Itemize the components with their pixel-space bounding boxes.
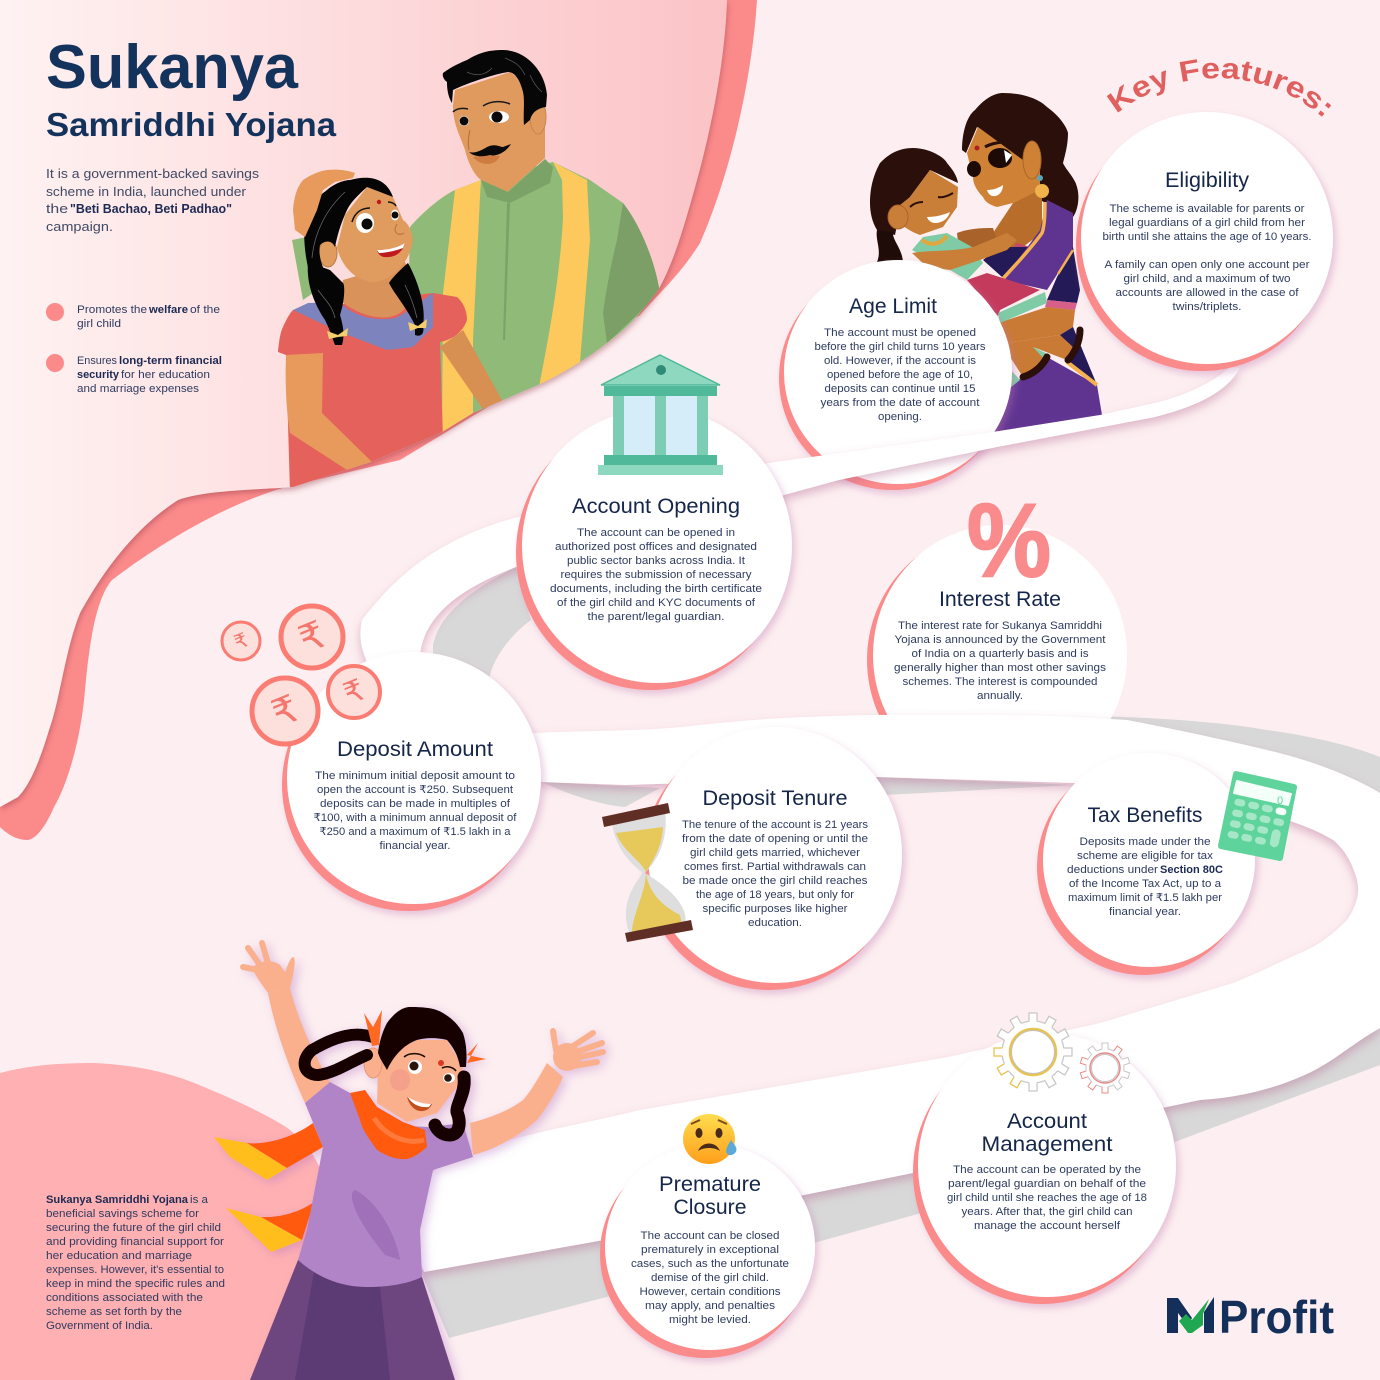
summary text: conditions associated with the bbox=[46, 1292, 203, 1304]
panel: premature closure: Premature bbox=[659, 1173, 761, 1196]
panel: eligibility: girl child, and a maximum of two bbox=[1124, 273, 1290, 285]
icon: rupee coins: ₹ bbox=[293, 614, 331, 662]
panel: deposit amount bbox=[282, 652, 541, 911]
panel: deposit amount: Deposit Amount bbox=[337, 738, 493, 761]
bullet: welfare bbox=[46, 303, 220, 330]
interest rate text: annually. bbox=[977, 690, 1023, 702]
panel: account opening: The account can be opened in bbox=[577, 527, 735, 539]
panel: account opening: of the girl child and KYC documents of bbox=[557, 597, 756, 609]
panel: deposit tenure: the age of 18 years, but only for bbox=[696, 889, 854, 901]
panel: eligibility: accounts are allowed in the case of bbox=[1116, 287, 1300, 299]
panel: deposit tenure: education. bbox=[748, 917, 802, 929]
panel: account opening: requires the submission of necessary bbox=[560, 569, 752, 581]
panel: deposit amount: ₹100, with a minimum annual deposit of bbox=[314, 812, 517, 824]
panel: account opening: public sector banks across India. It bbox=[567, 555, 745, 567]
grey underside of ribbon bbox=[420, 567, 1380, 1338]
panel: age limit: opening. bbox=[878, 411, 922, 423]
panel: tax benefits: Tax Benefits bbox=[1088, 804, 1202, 827]
panel: premature closure: The account can be closed bbox=[640, 1230, 780, 1242]
panel: deposit amount: ₹250 and a maximum of ₹1.5 lakh in a bbox=[320, 826, 511, 838]
panel: account management: parent/legal guardian on behalf of the bbox=[948, 1178, 1146, 1190]
summary text: securing the future of the girl child bbox=[46, 1222, 221, 1234]
panel: deposit amount: The minimum initial deposit amount to bbox=[315, 770, 515, 782]
bullet: financial security: Ensures bbox=[77, 355, 117, 367]
bullet: financial security: security bbox=[77, 369, 120, 381]
panel: deposit tenure: Deposit Tenure bbox=[702, 787, 848, 810]
summary text: Sukanya Samriddhi Yojana bbox=[46, 1194, 189, 1206]
summary text: scheme as set forth by the bbox=[46, 1306, 182, 1318]
panel: account management bbox=[913, 1033, 1176, 1304]
panel: tax benefits: Deposits made under the bbox=[1080, 836, 1210, 848]
summary text: expenses. However, it's essential to bbox=[46, 1264, 224, 1276]
interest rate text: of India on a quarterly basis and is bbox=[912, 648, 1089, 660]
intro text: campaign. bbox=[46, 219, 113, 234]
panel: age limit bbox=[779, 260, 1012, 490]
panel: deposit amount: financial year. bbox=[380, 840, 450, 852]
panel: tax benefits: scheme are eligible for tax bbox=[1077, 850, 1214, 862]
panel: age limit: deposits can continue until 15 bbox=[824, 383, 976, 395]
panel: age limit: opened before the age of 10, bbox=[827, 369, 973, 381]
bullet: welfare: Promotes the bbox=[77, 304, 147, 316]
panel: tax benefits: deductions under bbox=[1067, 864, 1158, 876]
heading: key features: Key Features: bbox=[1106, 59, 1332, 117]
summary text: is a bbox=[190, 1194, 209, 1206]
panel: account management: Management bbox=[982, 1133, 1113, 1156]
panel: eligibility: legal guardians of a girl child from her bbox=[1109, 217, 1305, 229]
icon: rupee coins: ₹ bbox=[231, 629, 251, 655]
panel: account management: girl child until she reaches the age of 18 bbox=[947, 1192, 1147, 1204]
summary text bbox=[46, 1194, 225, 1332]
panel: deposit tenure: comes first. Partial withdrawals can bbox=[684, 861, 866, 873]
panel: eligibility bbox=[1076, 112, 1333, 371]
panel: deposit tenure: specific purposes like higher bbox=[702, 903, 848, 915]
icon: rupee coins: ₹ bbox=[266, 688, 304, 736]
panel: deposit tenure: The tenure of the account is 21 years bbox=[682, 819, 869, 831]
summary text: Government of India. bbox=[46, 1320, 153, 1332]
panel: account opening: documents, including the birth certificate bbox=[550, 583, 762, 595]
intro text: scheme in India, launched under bbox=[46, 184, 247, 199]
logo: MProfit bbox=[1167, 1291, 1334, 1343]
panel: deposit tenure: from the date of opening or until the bbox=[682, 833, 868, 845]
panel: tax benefits: Section 80C bbox=[1160, 864, 1223, 876]
interest rate text: Interest Rate bbox=[939, 588, 1061, 611]
summary text: beneficial savings scheme for bbox=[46, 1208, 199, 1220]
icon: rupee coins: ₹ bbox=[339, 674, 369, 711]
panel: tax benefits: maximum limit of ₹1.5 lakh per bbox=[1068, 892, 1222, 904]
panel: age limit: old. However, if the account is bbox=[824, 355, 977, 367]
illustration: happy girl bbox=[214, 943, 603, 1380]
illustration: father and daughter bbox=[278, 50, 660, 492]
icon: calculator: 0 bbox=[1277, 795, 1283, 807]
icon: percent sign: % bbox=[967, 483, 1051, 599]
interest rate text: generally higher than most other savings bbox=[894, 662, 1107, 674]
illustration: mother and child bbox=[870, 93, 1102, 432]
panel: interest rate bbox=[867, 525, 1127, 719]
panel: account management: manage the account herself bbox=[974, 1220, 1121, 1232]
panel: account opening: Account Opening bbox=[572, 495, 740, 518]
panel: account opening bbox=[516, 409, 792, 690]
interest rate text bbox=[894, 483, 1107, 702]
icon: gears bbox=[994, 1013, 1130, 1093]
panel: eligibility: Eligibility bbox=[1165, 169, 1250, 192]
panel: premature closure: prematurely in exceptional bbox=[641, 1244, 779, 1256]
bullet: welfare: girl child bbox=[77, 318, 121, 330]
panel: premature closure: Closure bbox=[674, 1196, 746, 1219]
panel: deposit tenure: girl child gets married, whichever bbox=[690, 847, 860, 859]
panel: age limit: Age Limit bbox=[849, 295, 937, 318]
panel: account management: The account can be operated by the bbox=[953, 1164, 1141, 1176]
intro text: "Beti Bachao, Beti Padhao" bbox=[70, 201, 232, 216]
panel: premature closure: may apply, and penalties bbox=[645, 1300, 776, 1312]
panel: deposit tenure: be made once the girl child reaches bbox=[682, 875, 868, 887]
title: Samriddhi Yojana bbox=[46, 106, 337, 143]
bullet: welfare: welfare bbox=[148, 304, 188, 316]
title bbox=[46, 33, 337, 143]
summary text: her education and marriage bbox=[46, 1250, 192, 1262]
panel: tax benefits bbox=[1037, 753, 1255, 975]
panel: premature closure bbox=[600, 1144, 815, 1358]
intro text: the bbox=[46, 201, 68, 216]
icon: rupee coins bbox=[222, 606, 380, 744]
summary text: keep in mind the specific rules and bbox=[46, 1278, 225, 1290]
panel: premature closure: cases, such as the unfortunate bbox=[631, 1258, 789, 1270]
bullet: financial security: for her education bbox=[121, 369, 210, 381]
panel: eligibility: A family can open only one account per bbox=[1104, 259, 1310, 271]
panel: premature closure: demise of the girl child. bbox=[651, 1272, 769, 1284]
icon: crying emoji bbox=[683, 1114, 736, 1164]
panel: account opening: authorized post offices and designated bbox=[555, 541, 757, 553]
interest rate text: schemes. The interest is compounded bbox=[902, 676, 1098, 688]
intro text bbox=[46, 166, 260, 234]
icon: hourglass bbox=[602, 803, 693, 942]
bullet: financial security bbox=[46, 354, 222, 395]
panel: age limit: The account must be opened bbox=[824, 327, 976, 339]
icon: calculator bbox=[1221, 774, 1294, 858]
bullet: welfare: of the bbox=[190, 304, 220, 316]
intro text: It is a government-backed savings bbox=[46, 166, 260, 181]
logo: MProfit: Profit bbox=[1219, 1291, 1334, 1343]
interest rate text: Yojana is announced by the Government bbox=[894, 634, 1106, 646]
panel: premature closure: However, certain conditions bbox=[640, 1286, 781, 1298]
panel: eligibility: twins/triplets. bbox=[1172, 301, 1242, 313]
title: Sukanya bbox=[46, 33, 299, 102]
panel: premature closure: might be levied. bbox=[669, 1314, 751, 1326]
icon: bank bbox=[598, 355, 723, 475]
panel: age limit: years from the date of account bbox=[820, 397, 980, 409]
panel: eligibility: The scheme is available for parents or bbox=[1110, 203, 1305, 215]
panel: age limit: before the girl child turns 10 years bbox=[814, 341, 986, 353]
panel: account management: Account bbox=[1007, 1110, 1087, 1133]
bullet: financial security: and marriage expenses bbox=[77, 383, 200, 395]
interest rate text: The interest rate for Sukanya Samriddhi bbox=[898, 620, 1102, 632]
panel: deposit amount: deposits can be made in multiples of bbox=[320, 798, 511, 810]
panel: tax benefits: financial year. bbox=[1109, 906, 1181, 918]
panel: deposit tenure bbox=[642, 727, 902, 990]
bullet: financial security: long-term financial bbox=[119, 355, 222, 367]
panel: account opening: the parent/legal guardian. bbox=[588, 611, 724, 623]
panel: tax benefits: of the Income Tax Act, up to a bbox=[1069, 878, 1222, 890]
panel: deposit amount: open the account is ₹250. Subsequent bbox=[317, 784, 513, 796]
summary text: and providing financial support for bbox=[46, 1236, 224, 1248]
white ribbon road bbox=[360, 367, 1380, 1272]
panel: header background bbox=[0, 0, 727, 807]
panel: bottom-left blob bbox=[0, 1063, 340, 1380]
panel: eligibility: birth until she attains the age of 10 years. bbox=[1102, 231, 1312, 243]
salmon ribbon edge of header panel bbox=[0, 0, 757, 840]
panel: account management: years. After that, the girl child can bbox=[962, 1206, 1132, 1218]
